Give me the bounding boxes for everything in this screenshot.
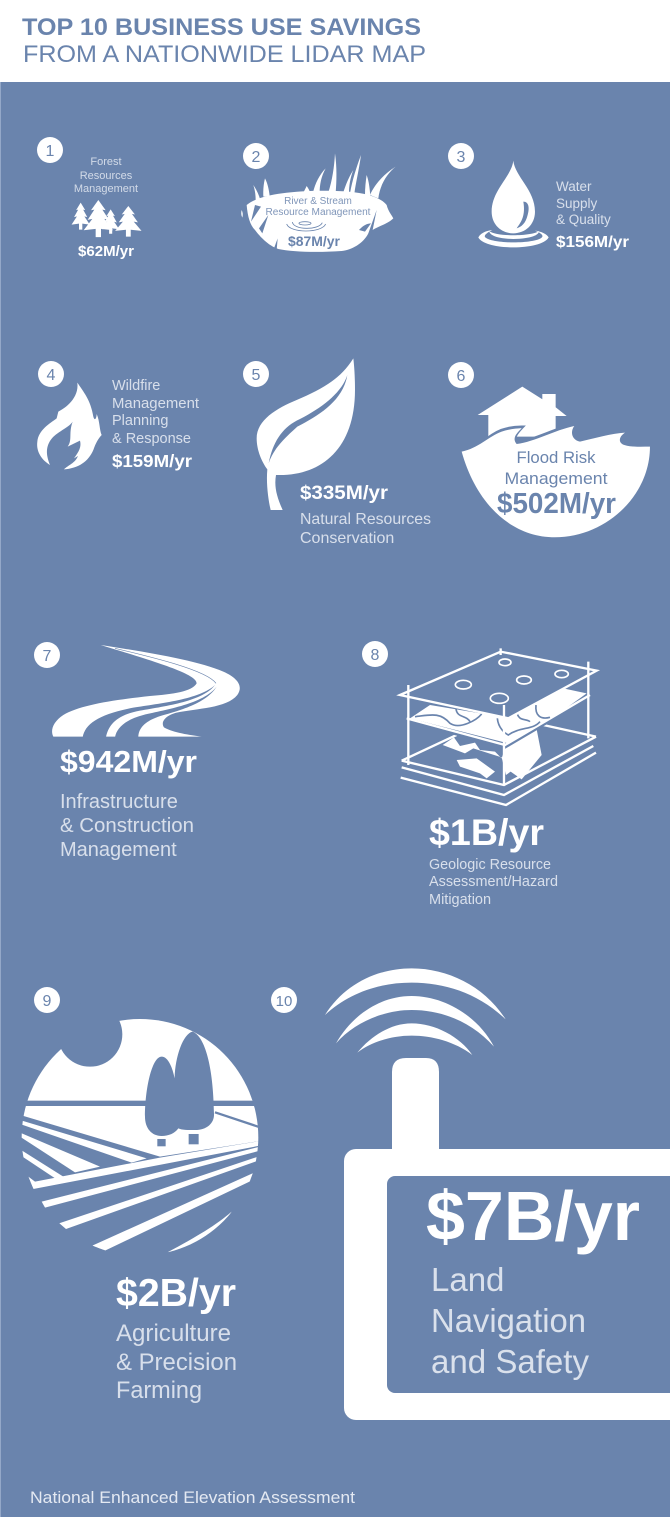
- icon: stacked map layers: [400, 648, 597, 805]
- number badge 10: 10: [276, 993, 292, 1010]
- device: mast and frame: [344, 1058, 670, 1420]
- label: water supply and quality: & Quality: [556, 212, 611, 227]
- number badge 4: [38, 361, 64, 387]
- item 6: flood risk: [448, 362, 650, 537]
- value: $335M/yr: $335M/yr: [300, 483, 389, 504]
- value: $7B/yr: $7B/yr: [426, 1177, 640, 1255]
- label: forest resources management: Resources: [80, 170, 133, 182]
- label: water supply and quality: Water: [556, 179, 592, 194]
- icon: signal waves: [325, 968, 506, 1055]
- number badge 9: 9: [43, 993, 52, 1010]
- value: $159M/yr: $159M/yr: [112, 451, 192, 471]
- value: $62M/yr: $62M/yr: [78, 243, 134, 260]
- number badge 2: [243, 143, 269, 169]
- number badge 2: 2: [252, 149, 261, 166]
- item 5: natural resources: [243, 358, 431, 547]
- value: $87M/yr: $87M/yr: [288, 233, 341, 249]
- label: geologic resource assessment hazard mitigation: [429, 857, 558, 908]
- label: agriculture and precision farming: Agriculture: [116, 1320, 231, 1347]
- item 9: agriculture: [20, 987, 260, 1404]
- value: $1B/yr: $1B/yr: [429, 812, 544, 853]
- label: geologic resource assessment hazard mitigation: Geologic Resource: [429, 857, 551, 873]
- number badge 8: 8: [371, 647, 380, 664]
- label: forest resources management: Forest: [90, 156, 122, 168]
- label: infrastructure and construction management: & Construction: [60, 815, 194, 837]
- label: geologic resource assessment hazard mitigation: Assessment/Hazard: [429, 874, 558, 890]
- label: flood risk management: Management: [504, 469, 608, 488]
- label: land navigation and safety: and Safety: [431, 1343, 590, 1380]
- icon: flame: [37, 383, 102, 469]
- number badge 5: [243, 361, 269, 387]
- item 7: infrastructure: [34, 642, 240, 861]
- icon: house over flood wave: [462, 387, 650, 537]
- value: $156M/yr: $156M/yr: [556, 234, 629, 251]
- value: $502M/yr: $502M/yr: [497, 488, 616, 520]
- label: wildfire management planning and response: [112, 378, 199, 447]
- label: natural resources conservation: [300, 511, 431, 547]
- number badge 3: [448, 143, 474, 169]
- number badge 8: [362, 641, 388, 667]
- label: agriculture and precision farming: [116, 1320, 237, 1404]
- number badge 4: 4: [47, 367, 56, 384]
- label: geologic resource assessment hazard mitigation: Mitigation: [429, 892, 491, 908]
- title: TOP 10 BUSINESS USE SAVINGS: [22, 14, 421, 41]
- label: wildfire management planning and response: & Response: [112, 431, 191, 447]
- label: river and stream resource management: River & Stream: [284, 196, 352, 207]
- label: forest resources management: Management: [74, 183, 138, 195]
- label: land navigation and safety: Land: [431, 1261, 504, 1298]
- item 10: land navigation: [271, 968, 670, 1420]
- value: $2B/yr: $2B/yr: [116, 1272, 236, 1315]
- label: infrastructure and construction management: [60, 791, 194, 861]
- item 1: forest resources: [37, 137, 142, 260]
- item 4: wildfire: [37, 361, 199, 471]
- label: natural resources conservation: Natural Resources: [300, 511, 431, 528]
- title: [22, 14, 426, 68]
- label: agriculture and precision farming: Farming: [116, 1377, 202, 1404]
- icon: leaf: [257, 358, 355, 510]
- item 2: river and stream: [241, 143, 396, 252]
- label: river and stream resource management: Resource Management: [266, 207, 371, 218]
- label: wildfire management planning and response: Management: [112, 396, 199, 412]
- label: infrastructure and construction management: Management: [60, 839, 177, 861]
- label: land navigation and safety: [431, 1261, 590, 1380]
- label: water supply and quality: [556, 179, 611, 227]
- label: river and stream resource management: [266, 196, 371, 218]
- icon: pine trees: [72, 200, 142, 237]
- number badge 9: [34, 987, 60, 1013]
- label: wildfire management planning and response: Planning: [112, 413, 168, 429]
- item 3: water supply: [448, 143, 629, 251]
- icon: winding road: [52, 645, 240, 737]
- label: infrastructure and construction management: Infrastructure: [60, 791, 178, 813]
- item 8: geologic: [362, 641, 597, 908]
- label: agriculture and precision farming: & Precision: [116, 1349, 237, 1376]
- icon: pond with grass: [241, 153, 396, 252]
- number badge 3: 3: [457, 149, 466, 166]
- value: $942M/yr: $942M/yr: [60, 744, 197, 779]
- label: wildfire management planning and response: Wildfire: [112, 378, 160, 394]
- label: flood risk management: [504, 448, 608, 488]
- number badge 6: [448, 362, 474, 388]
- label: flood risk management: Flood Risk: [516, 448, 596, 467]
- number badge 6: 6: [457, 368, 466, 385]
- label: forest resources management: [74, 156, 138, 195]
- number badge 5: 5: [252, 367, 261, 384]
- number badge 7: [34, 642, 60, 668]
- label: water supply and quality: Supply: [556, 196, 598, 211]
- label: land navigation and safety: Navigation: [431, 1302, 586, 1339]
- number badge 10: [271, 987, 297, 1013]
- icon: water drop with ripples: [478, 161, 549, 247]
- label: natural resources conservation: Conservation: [300, 530, 394, 547]
- footer: source: National Enhanced Elevation Assessment: [30, 1488, 355, 1507]
- number badge 7: 7: [43, 648, 52, 665]
- title: FROM A NATIONWIDE LIDAR MAP: [23, 41, 426, 68]
- icon: farm field with trees and moon: [20, 1002, 260, 1252]
- number badge 1: 1: [46, 143, 55, 160]
